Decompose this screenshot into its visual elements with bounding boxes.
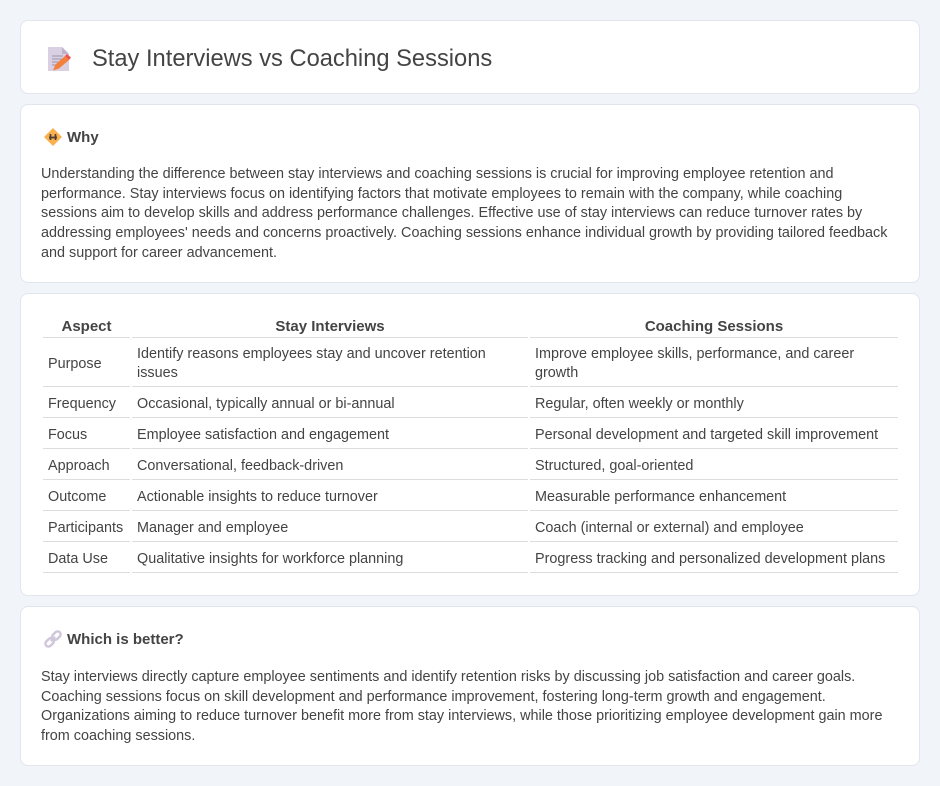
which is better paragraph: Coaching sessions focus on skill development and performance improvement, fostering long-term growth and engagement. bbox=[41, 689, 826, 705]
row: outcome: Actionable insights to reduce turnover bbox=[137, 489, 378, 505]
table header bbox=[61, 318, 783, 335]
row: approach bbox=[48, 458, 693, 474]
table header: Stay Interviews bbox=[275, 318, 385, 335]
row: participants: Participants bbox=[48, 520, 123, 536]
row: purpose: Purpose bbox=[48, 356, 102, 372]
why paragraph: Understanding the difference between stay interviews and coaching sessions is crucial for improving employee retention and bbox=[41, 166, 833, 182]
row: outcome: Outcome bbox=[48, 489, 106, 505]
row: purpose: growth bbox=[535, 364, 578, 380]
row: data use: Data Use bbox=[48, 551, 108, 567]
which is better paragraph: Stay interviews directly capture employee sentiments and identify retention risks by discussing job satisfaction and career goals. bbox=[41, 669, 855, 685]
icon: link bbox=[44, 630, 62, 648]
panel: why bbox=[20, 104, 920, 283]
row: purpose bbox=[48, 346, 854, 380]
row: outcome: Measurable performance enhancement bbox=[535, 489, 786, 505]
header card bbox=[20, 20, 920, 94]
row: focus: Personal development and targeted skill improvement bbox=[535, 427, 878, 443]
which is better paragraph bbox=[41, 669, 882, 744]
row: purpose: issues bbox=[137, 364, 178, 380]
table header: Coaching Sessions bbox=[645, 318, 783, 335]
panel: comparison table bbox=[20, 293, 920, 596]
row: approach: Structured, goal-oriented bbox=[535, 458, 693, 474]
row: outcome bbox=[48, 489, 786, 505]
title: Stay Interviews vs Coaching Sessions bbox=[92, 46, 492, 72]
row: frequency: Occasional, typically annual or bi-annual bbox=[137, 396, 395, 412]
why paragraph: and support for career advancement. bbox=[41, 245, 277, 261]
row: data use: Qualitative insights for workforce planning bbox=[137, 551, 403, 567]
row: purpose: Identify reasons employees stay and uncover retention bbox=[137, 346, 486, 362]
row: participants bbox=[48, 520, 804, 536]
row: approach: Conversational, feedback-driven bbox=[137, 458, 343, 474]
panel: which is better bbox=[20, 606, 920, 766]
why paragraph: sessions aim to develop skills and address performance challenges. Effective use of stay interviews can reduce turnover rates by bbox=[41, 205, 862, 221]
row: frequency: Regular, often weekly or monthly bbox=[535, 396, 744, 412]
heading: why: Why bbox=[67, 129, 99, 146]
row: focus: Focus bbox=[48, 427, 87, 443]
row: frequency bbox=[48, 396, 744, 412]
row: data use bbox=[48, 551, 885, 567]
heading: which is better: Which is better? bbox=[67, 631, 184, 648]
why paragraph: performance. Stay interviews focus on identifying factors that motivate employees to remain with the company, while coaching bbox=[41, 186, 842, 202]
which is better paragraph: Organizations aiming to reduce turnover benefit more from stay interviews, while those prioritizing employee development gain more bbox=[41, 708, 882, 724]
row: participants: Coach (internal or external) and employee bbox=[535, 520, 804, 536]
row: approach: Approach bbox=[48, 458, 110, 474]
which is better paragraph: from coaching sessions. bbox=[41, 728, 195, 744]
icon: document with pencil bbox=[48, 47, 71, 71]
icon: warning diamond bbox=[44, 128, 62, 146]
row: frequency: Frequency bbox=[48, 396, 116, 412]
table header: Aspect bbox=[61, 318, 112, 335]
row: data use: Progress tracking and personalized development plans bbox=[535, 551, 885, 567]
why paragraph bbox=[41, 166, 888, 261]
row: participants: Manager and employee bbox=[137, 520, 288, 536]
row: purpose: Improve employee skills, performance, and career bbox=[535, 346, 854, 362]
row: focus: Employee satisfaction and engagement bbox=[137, 427, 389, 443]
row: focus bbox=[48, 427, 878, 443]
why paragraph: addressing employees' needs and concerns proactively. Coaching sessions enhance individual growth by providing tailored feedback bbox=[41, 225, 887, 241]
